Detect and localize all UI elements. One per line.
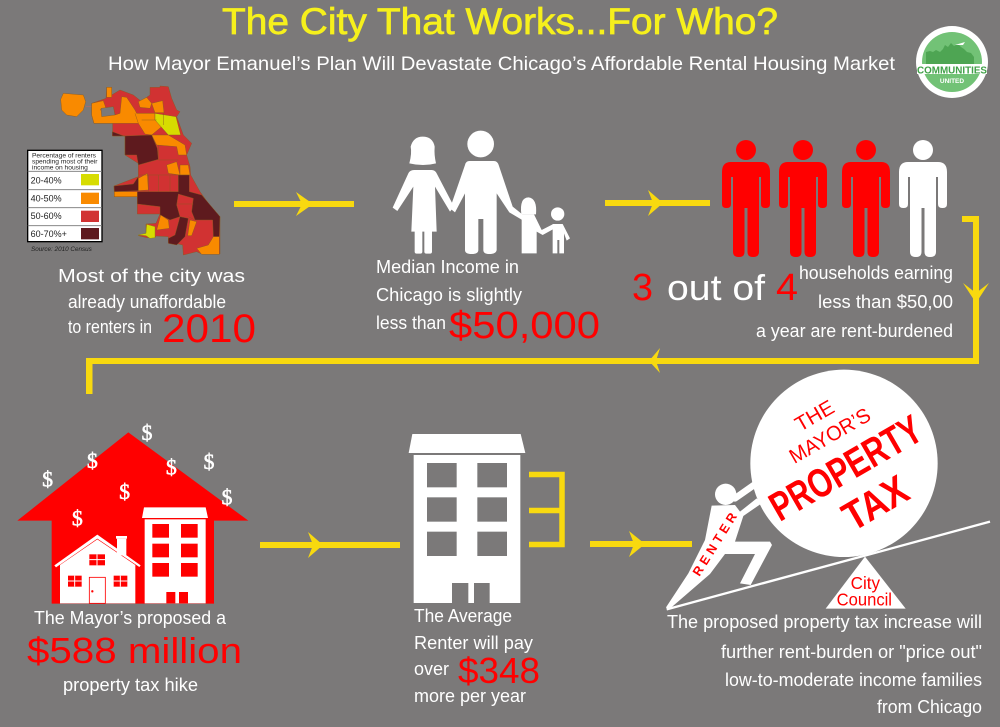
legend: percentage of renters: 60-70%+	[31, 229, 67, 239]
text: 3 out of 4 households	[632, 263, 953, 341]
boulder: the mayor's property tax: PROPERTY	[761, 406, 930, 530]
text: 3 out of 4 households: 4	[776, 267, 798, 309]
fulcrum: city council: City	[851, 573, 880, 593]
fulcrum: city council: Council	[837, 589, 892, 609]
legend: percentage of renters: Percentage of renters	[32, 152, 97, 159]
bracket: three units	[529, 474, 562, 544]
text: proposed increase: from Chicago	[877, 697, 982, 717]
arrow: long connector to second row	[86, 216, 989, 394]
subtitle: How Mayor Emanuel’s Plan Will Devastate Chicago’s Affordable Rental Housing Market	[108, 53, 896, 75]
text: average renter: The Average	[414, 606, 512, 626]
figure: renter: RENTER	[690, 510, 740, 579]
text: $588 million: $588 million	[27, 630, 242, 671]
logo: Communities United: UNITED	[940, 78, 964, 85]
text: median income: $50,000	[449, 305, 600, 347]
legend: percentage of renters: 50-60%	[31, 211, 62, 221]
boulder: the mayor's property tax: TAX	[834, 466, 916, 540]
icon: dollar signs: $	[87, 448, 98, 473]
icon: dollar signs: $	[203, 449, 214, 474]
text: average renter: more per year	[414, 686, 526, 706]
boulder: the mayor's property tax: MAYOR’S	[785, 404, 875, 468]
legend: percentage of renters	[28, 150, 102, 253]
arrow: family to households	[605, 190, 710, 216]
icon: dollar signs: $	[166, 454, 177, 479]
text: $588 million: The Mayor’s proposed a	[34, 608, 227, 628]
illustration: renter pushing property tax	[666, 370, 990, 610]
text: 3 out of 4 households: households earning	[799, 263, 953, 283]
text: most of the city	[58, 266, 256, 351]
fulcrum: city council	[826, 557, 906, 609]
legend: percentage of renters: income on housing	[32, 164, 88, 171]
icon: apartment building white	[409, 434, 525, 603]
text: most of the city: to renters in	[68, 317, 152, 337]
logo: Communities United	[916, 26, 988, 98]
text: 3 out of 4 households: a year are rent-burdened	[756, 321, 953, 341]
text: $588 million	[27, 608, 242, 695]
text: $588 million: property tax hike	[63, 675, 198, 695]
text: average renter: $348	[458, 650, 540, 691]
text: proposed increase: low-to-moderate income families	[725, 670, 982, 690]
arrow: house to building	[260, 532, 400, 558]
icon: dollar signs: $	[141, 420, 152, 445]
arrow: building to renter	[590, 531, 692, 557]
icon: dollar signs: $	[42, 466, 53, 491]
icon: red person 3	[842, 140, 890, 257]
icon: apartment building	[142, 507, 208, 603]
text: 3 out of 4 households: 3	[632, 267, 653, 309]
icon: four households	[722, 140, 947, 257]
legend: percentage of renters: spending most of their	[32, 158, 98, 165]
slope line	[667, 522, 990, 609]
text: 3 out of 4 households: out of	[667, 267, 766, 308]
icon: red house with dollar signs	[17, 420, 248, 604]
icon: red person 2	[779, 140, 827, 257]
text: 3 out of 4 households: less than $50,00	[818, 292, 953, 312]
text: median income: Chicago is slightly	[376, 285, 522, 305]
text: proposed increase	[667, 612, 982, 717]
map: renters spending most of income on housing	[61, 86, 220, 255]
text: median income	[376, 257, 600, 347]
text: most of the city: Most of the city was	[58, 266, 245, 286]
logo: Communities United: COMMUNITIES	[917, 66, 987, 76]
text: most of the city: 2010	[162, 307, 256, 351]
icon: red person 1	[722, 140, 770, 257]
text: average renter	[414, 606, 540, 706]
icon: white person	[899, 140, 947, 257]
title: The City That Works...For Who?	[222, 1, 778, 42]
text: median income: less than	[376, 313, 446, 333]
text: proposed increase: The proposed property tax increase will	[667, 612, 982, 632]
legend: percentage of renters: 20-40%	[31, 175, 62, 185]
icon: dollar signs: $	[119, 479, 130, 504]
text: median income: Median Income in	[376, 257, 519, 277]
figure: renter	[666, 484, 772, 610]
arrow: map to family	[234, 192, 354, 216]
boulder: the mayor's property tax	[750, 370, 938, 557]
text: most of the city: already unaffordable	[68, 292, 226, 312]
boulder: the mayor's property tax: THE	[791, 396, 838, 436]
icon: small house	[54, 535, 141, 603]
text: average renter: over	[414, 659, 449, 679]
legend: percentage of renters: Source: 2010 Census	[31, 246, 93, 253]
text: proposed increase: further rent-burden or "price out"	[721, 642, 982, 662]
legend: percentage of renters: 40-50%	[31, 193, 62, 203]
icon: family	[393, 131, 570, 254]
icon: dollar signs: $	[72, 506, 83, 531]
icon: dollar signs	[42, 420, 232, 531]
text: average renter: Renter will pay	[414, 633, 533, 653]
icon: dollar signs: $	[221, 485, 232, 510]
